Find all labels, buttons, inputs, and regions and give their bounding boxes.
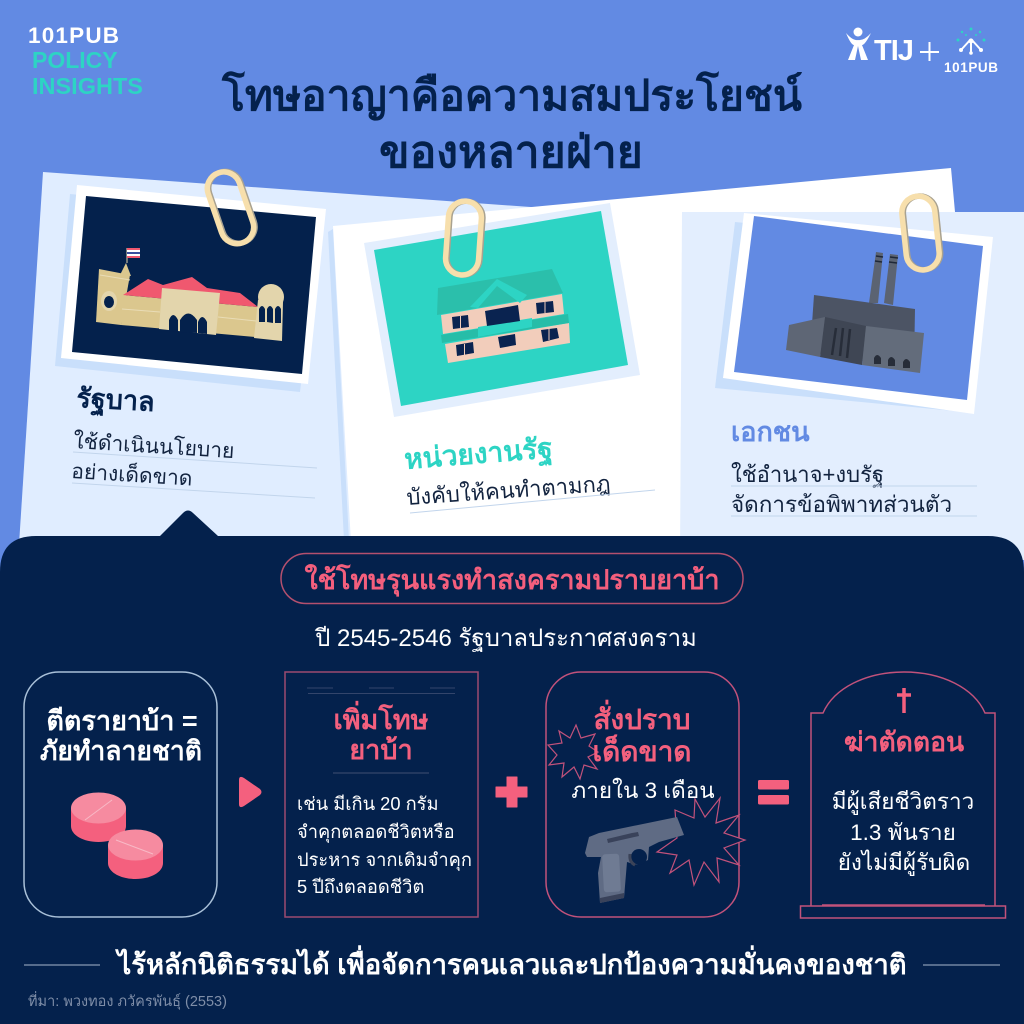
- card: increased penalty: จำคุกตลอดชีวิตหรือ: [297, 821, 455, 844]
- text: government description: [71, 429, 317, 498]
- icon: equals: [758, 780, 789, 804]
- text: private sector description: [731, 462, 977, 517]
- conclusion: ไร้หลักนิติธรรมได้ เพื่อจัดการคนเลวและปกป้องความมั่นคงของชาติ: [114, 945, 907, 980]
- logo: 101PUB Policy Insights: INSIGHTS: [32, 73, 143, 99]
- card: increased penalty: เช่น มีเกิน 20 กรัม: [297, 793, 439, 814]
- title: ของหลายฝ่าย: [379, 128, 643, 177]
- icon: paperclip 3: [900, 194, 942, 272]
- card: branding: ภัยทำลายชาติ: [40, 736, 202, 766]
- panel: war on drugs: [0, 510, 1024, 1024]
- panel: private sector paper: [680, 212, 1024, 560]
- label: government: รัฐบาล: [76, 383, 155, 420]
- card: increased penalty: ยาบ้า: [349, 735, 413, 765]
- logo: TIJ + 101PUB: 101PUB: [944, 60, 999, 75]
- icon: pills: [71, 792, 163, 879]
- card: suppression order: [546, 672, 745, 917]
- text: government description: ใช้ดำเนินนโยบาย: [73, 429, 235, 463]
- card: suppression order: ภายใน 3 เดือน: [571, 778, 715, 803]
- text: declaration: ปี 2545-2546 รัฐบาลประกาศสงคราม: [314, 625, 697, 652]
- card: branding: [24, 672, 217, 917]
- logo: 101PUB Policy Insights: [28, 23, 143, 99]
- icon: pistol: [585, 817, 684, 903]
- panel: state agencies paper: [328, 168, 1024, 560]
- card: branding: ตีตรายาบ้า =: [46, 706, 198, 736]
- photo: government building: [55, 185, 326, 392]
- card: suppression order: สั่งปราบ: [593, 699, 691, 735]
- text: private sector description: จัดการข้อพิพาทส่วนตัว: [731, 492, 952, 517]
- source: ที่มา: พวงทอง ภวัครพันธุ์ (2553): [28, 991, 227, 1010]
- label: private sector: เอกชน: [731, 417, 810, 447]
- heading pill: [281, 554, 743, 604]
- arrow: [239, 777, 262, 807]
- photo: factory: [715, 213, 993, 414]
- icon: paperclip 2: [444, 200, 484, 276]
- icon: paperclip 1: [203, 167, 260, 248]
- text: private sector description: ใช้อำนาจ+งบรัฐ: [731, 462, 884, 488]
- card: increased penalty: [285, 672, 478, 917]
- icon: plus: [496, 777, 527, 807]
- title: โทษอาญาคือความสมประโยชน์: [221, 70, 802, 121]
- logo: 101PUB Policy Insights: 101PUB: [28, 23, 120, 48]
- text: government description: อย่างเด็ดขาด: [71, 457, 193, 491]
- card: increased penalty: ประหาร จากเดิมจำคุก: [297, 849, 472, 872]
- logo: TIJ + 101PUB: [846, 28, 999, 75]
- card: tombstone: ฆ่าตัดตอน: [844, 727, 964, 757]
- panel: government paper: [18, 172, 600, 560]
- title: [221, 70, 802, 177]
- text: state agencies description: บังคับให้คนทำตามกฎ: [406, 471, 611, 510]
- burst large: [657, 798, 745, 885]
- card: tombstone: 1.3 พันราย: [850, 820, 956, 845]
- label: state agencies: หน่วยงานรัฐ: [403, 432, 554, 478]
- photo: state agency building: [364, 203, 640, 417]
- card: increased penalty: เพิ่มโทษ: [334, 700, 429, 735]
- logo: TIJ + 101PUB: TIJ: [874, 35, 913, 67]
- card: tombstone: [800, 672, 1006, 918]
- card: tombstone: มีผู้เสียชีวิตราว: [832, 789, 974, 815]
- heading pill: ใช้โทษรุนแรงทำสงครามปราบยาบ้า: [304, 563, 720, 597]
- burst small: [548, 725, 598, 779]
- card: increased penalty: 5 ปีถึงตลอดชีวิต: [297, 876, 424, 897]
- logo: 101PUB Policy Insights: POLICY: [32, 47, 118, 73]
- card: suppression order: เด็ดขาด: [593, 734, 691, 767]
- card: tombstone: ยังไม่มีผู้รับผิด: [838, 849, 970, 876]
